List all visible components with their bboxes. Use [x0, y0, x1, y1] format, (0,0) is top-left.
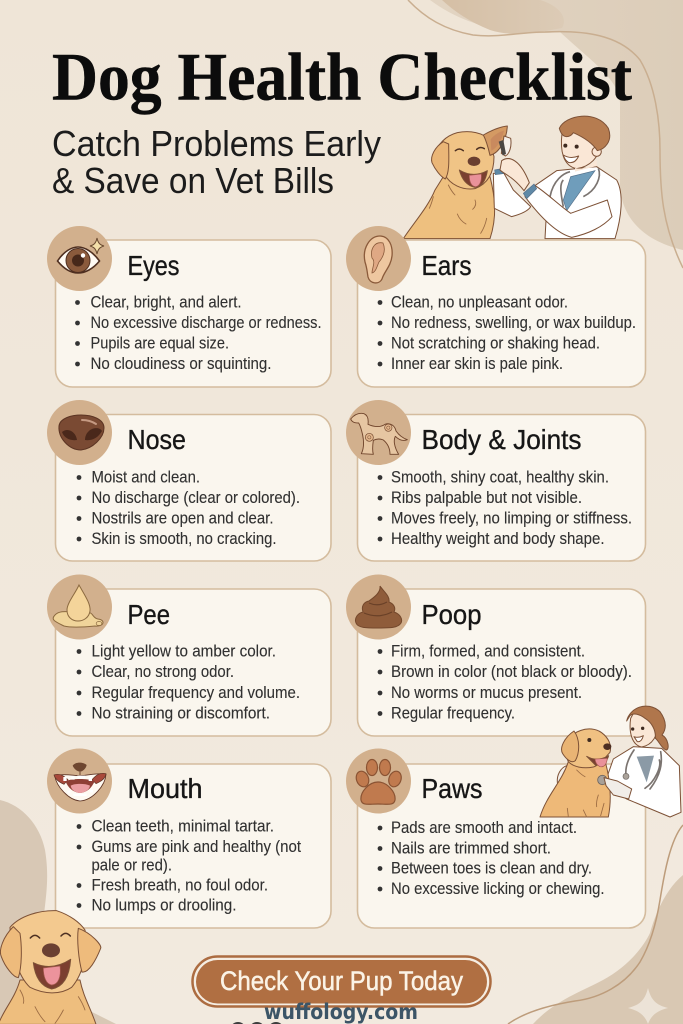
subtitle	[52, 123, 381, 201]
panel: Mouth	[47, 748, 331, 928]
heading: Nose	[128, 424, 186, 455]
checklist	[378, 818, 604, 898]
panel: Body & Joints	[346, 400, 646, 561]
subtitle: & Save on Vet Bills	[52, 160, 334, 201]
heading: Eyes	[128, 250, 180, 281]
checklist: Regular frequency.	[391, 704, 515, 722]
heading: Pee	[128, 599, 170, 630]
checklist: Nostrils are open and clear.	[92, 508, 274, 528]
icon: paw print	[346, 748, 411, 814]
icon: ear	[346, 226, 411, 291]
checklist: Pads are smooth and intact.	[391, 818, 577, 837]
icon: nose	[47, 400, 112, 465]
checklist: No excessive licking or chewing.	[391, 879, 604, 898]
checklist: Light yellow to amber color.	[92, 642, 276, 660]
button: Check Your Pup Today	[192, 956, 490, 1006]
checklist: Regular frequency and volume.	[92, 683, 300, 702]
checklist: Moves freely, no limping or stiffness.	[391, 508, 632, 528]
checklist	[77, 642, 300, 722]
checklist: Skin is smooth, no cracking.	[92, 529, 276, 548]
checklist: Moist and clean.	[92, 468, 200, 486]
checklist: pale or red).	[92, 856, 172, 874]
checklist: No cloudiness or squinting.	[90, 354, 272, 373]
icon: poop	[346, 574, 411, 640]
illustration: happy golden retriever	[0, 911, 101, 1024]
checklist: Healthy weight and body shape.	[391, 529, 604, 548]
title: Dog Health Checklist	[52, 38, 632, 114]
checklist: Clean teeth, minimal tartar.	[92, 816, 274, 836]
panel: Poop	[346, 574, 646, 736]
heading: Mouth	[128, 773, 202, 804]
checklist: Between toes is clean and dry.	[391, 858, 592, 878]
checklist	[378, 642, 632, 722]
panel: Paws	[346, 748, 646, 928]
vet head	[561, 131, 599, 169]
checklist: Pupils are equal size.	[90, 334, 229, 352]
checklist: No lumps or drooling.	[92, 896, 236, 914]
checklist: Nails are trimmed short.	[391, 838, 551, 858]
checklist: Clear, bright, and alert.	[90, 292, 242, 312]
checklist	[75, 292, 321, 373]
checklist: No discharge (clear or colored).	[92, 488, 300, 507]
icon: dog mouth	[47, 748, 112, 814]
icon: eye	[47, 226, 112, 291]
icon: dog body with joints	[346, 400, 411, 465]
illustration: vet examining dog with stethoscope	[540, 706, 681, 817]
checklist: No straining or discomfort.	[92, 704, 270, 722]
checklist: Inner ear skin is pale pink.	[391, 354, 563, 373]
checklist: No worms or mucus present.	[391, 683, 582, 702]
cut-off footer marks	[230, 1022, 284, 1024]
heading: Ears	[422, 250, 472, 281]
panel: Pee	[47, 574, 331, 736]
heading: Poop	[422, 599, 482, 630]
subtitle: Catch Problems Early	[52, 123, 381, 164]
checklist: Clean, no unpleasant odor.	[391, 292, 568, 312]
checklist: Not scratching or shaking head.	[391, 334, 600, 352]
panel: Ears	[346, 226, 646, 387]
checklist: No excessive discharge or redness.	[90, 313, 322, 332]
checklist: Clear, no strong odor.	[92, 662, 234, 681]
panel: Nose	[47, 400, 331, 561]
heading: Paws	[422, 773, 482, 804]
checklist: Firm, formed, and consistent.	[391, 642, 585, 660]
button: Check Your Pup Today: Check Your Pup Today	[220, 966, 463, 996]
checklist: Brown in color (not black or bloody).	[391, 662, 632, 681]
checklist	[378, 468, 632, 548]
checklist	[77, 468, 300, 548]
icon: urine drop	[47, 574, 112, 640]
checklist	[378, 292, 636, 373]
checklist	[77, 816, 301, 914]
heading: Body & Joints	[422, 424, 582, 455]
illustration: vet checking golden retriever's ear	[403, 116, 621, 239]
vet coat	[533, 167, 621, 239]
checklist: Smooth, shiny coat, healthy skin.	[391, 468, 609, 486]
checklist: No redness, swelling, or wax buildup.	[391, 313, 636, 332]
checklist: Ribs palpable but not visible.	[391, 488, 582, 507]
website url: wuffology.com	[264, 1000, 418, 1024]
panel: Eyes	[47, 226, 331, 387]
checklist: Fresh breath, no foul odor.	[92, 876, 268, 894]
checklist: Gums are pink and healthy (not	[92, 837, 301, 856]
